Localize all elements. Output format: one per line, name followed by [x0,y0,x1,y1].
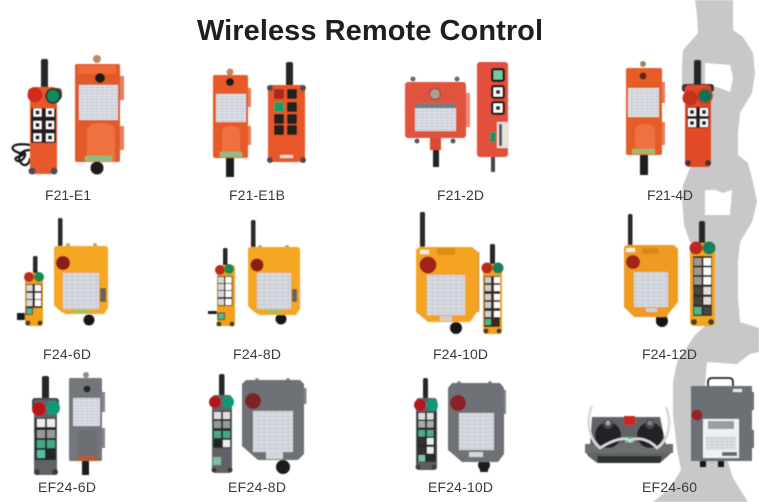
receiver [624,214,678,327]
receiver [69,372,105,475]
handset [28,87,62,174]
label: F21-2D: F21-2D [437,187,484,203]
label: F21-E1: F21-E1 [45,187,91,203]
handset [17,256,44,326]
title: Wireless Remote Control [197,15,543,47]
handset [267,62,306,163]
product: F24-12D [624,214,716,327]
handset [482,244,504,334]
receiver [448,381,506,472]
cable [13,144,30,165]
label: F24-6D: F24-6D [43,346,91,362]
product: F21-E1B [213,62,306,177]
label: EF24-8D: EF24-8D [228,479,286,495]
console [585,406,673,463]
receiver [54,218,108,326]
product: F24-8D [208,220,300,326]
product: EF24-10D [414,378,506,472]
label: F24-10D: F24-10D [433,346,488,362]
handset [414,378,438,470]
receiver [75,55,124,174]
receiver [248,220,300,324]
receiver [416,212,480,334]
product: EF24-8D [209,374,306,474]
handset [208,248,235,326]
receiver [242,378,306,474]
box receiver [691,378,754,467]
handset [690,221,716,326]
product: F24-6D [17,218,108,326]
label: EF24-10D: EF24-10D [428,479,493,495]
label: F24-12D: F24-12D [642,346,697,362]
receiver [626,61,665,175]
product: F21-2D [405,62,509,172]
product: F21-E1 [13,55,124,174]
handset [209,374,234,473]
label: EF24-60: EF24-60 [642,479,697,495]
handset [682,60,714,167]
label: F24-8D: F24-8D [233,346,281,362]
product: F24-10D [416,212,504,334]
label: F21-4D: F21-4D [647,187,693,203]
receiver [405,76,470,167]
label: F21-E1B: F21-E1B [229,187,285,203]
receiver [213,68,251,177]
handset [32,376,60,475]
label: EF24-6D: EF24-6D [38,479,96,495]
background chain silhouette [653,0,759,502]
product: EF24-6D [32,372,105,475]
product: EF24-60 [585,378,754,467]
handset [477,62,509,172]
product: F21-4D [626,60,714,175]
